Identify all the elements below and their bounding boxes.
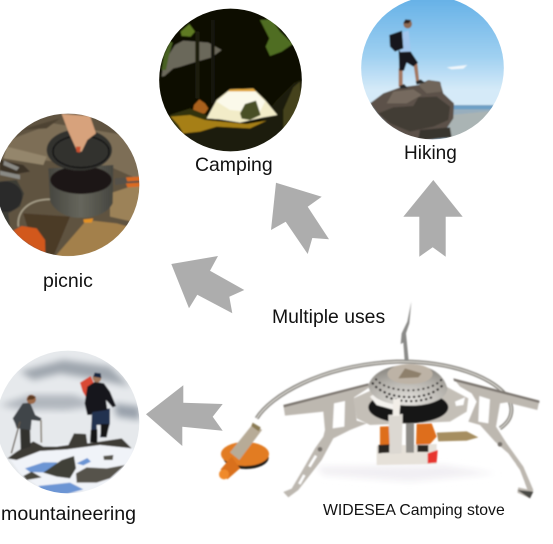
hose [257,362,511,428]
shadow [317,465,497,482]
icon: climber left [11,395,42,453]
label: camping: Camping [195,154,273,176]
label: multiple uses: Multiple uses [272,306,385,328]
burner dome [368,365,447,406]
arrow: to camping [271,183,329,254]
arrow: to hiking [403,180,463,257]
icon: hiker [389,19,425,89]
label: hiking: Hiking [404,143,457,164]
label: picnic: picnic [43,270,93,292]
right arm and leg [453,378,539,498]
burner base [353,385,468,425]
regulator [377,398,478,465]
photo: hiking [360,0,507,142]
label: mountaineering: mountaineering [1,503,136,525]
igniter spike [401,302,411,361]
arrow: to mountaineering [146,385,223,446]
label: stove name: WIDESEA Camping stove [323,502,505,519]
burner flame cap shadow [368,391,448,423]
photo: camping [157,7,307,157]
orange valve [219,423,269,479]
left arm and leg [283,383,369,497]
icon: climber right [80,373,116,443]
icon: camping stove [219,302,539,498]
photo: picnic [0,113,143,257]
photo: mountaineering [0,350,140,495]
arrow: to picnic [171,256,244,313]
